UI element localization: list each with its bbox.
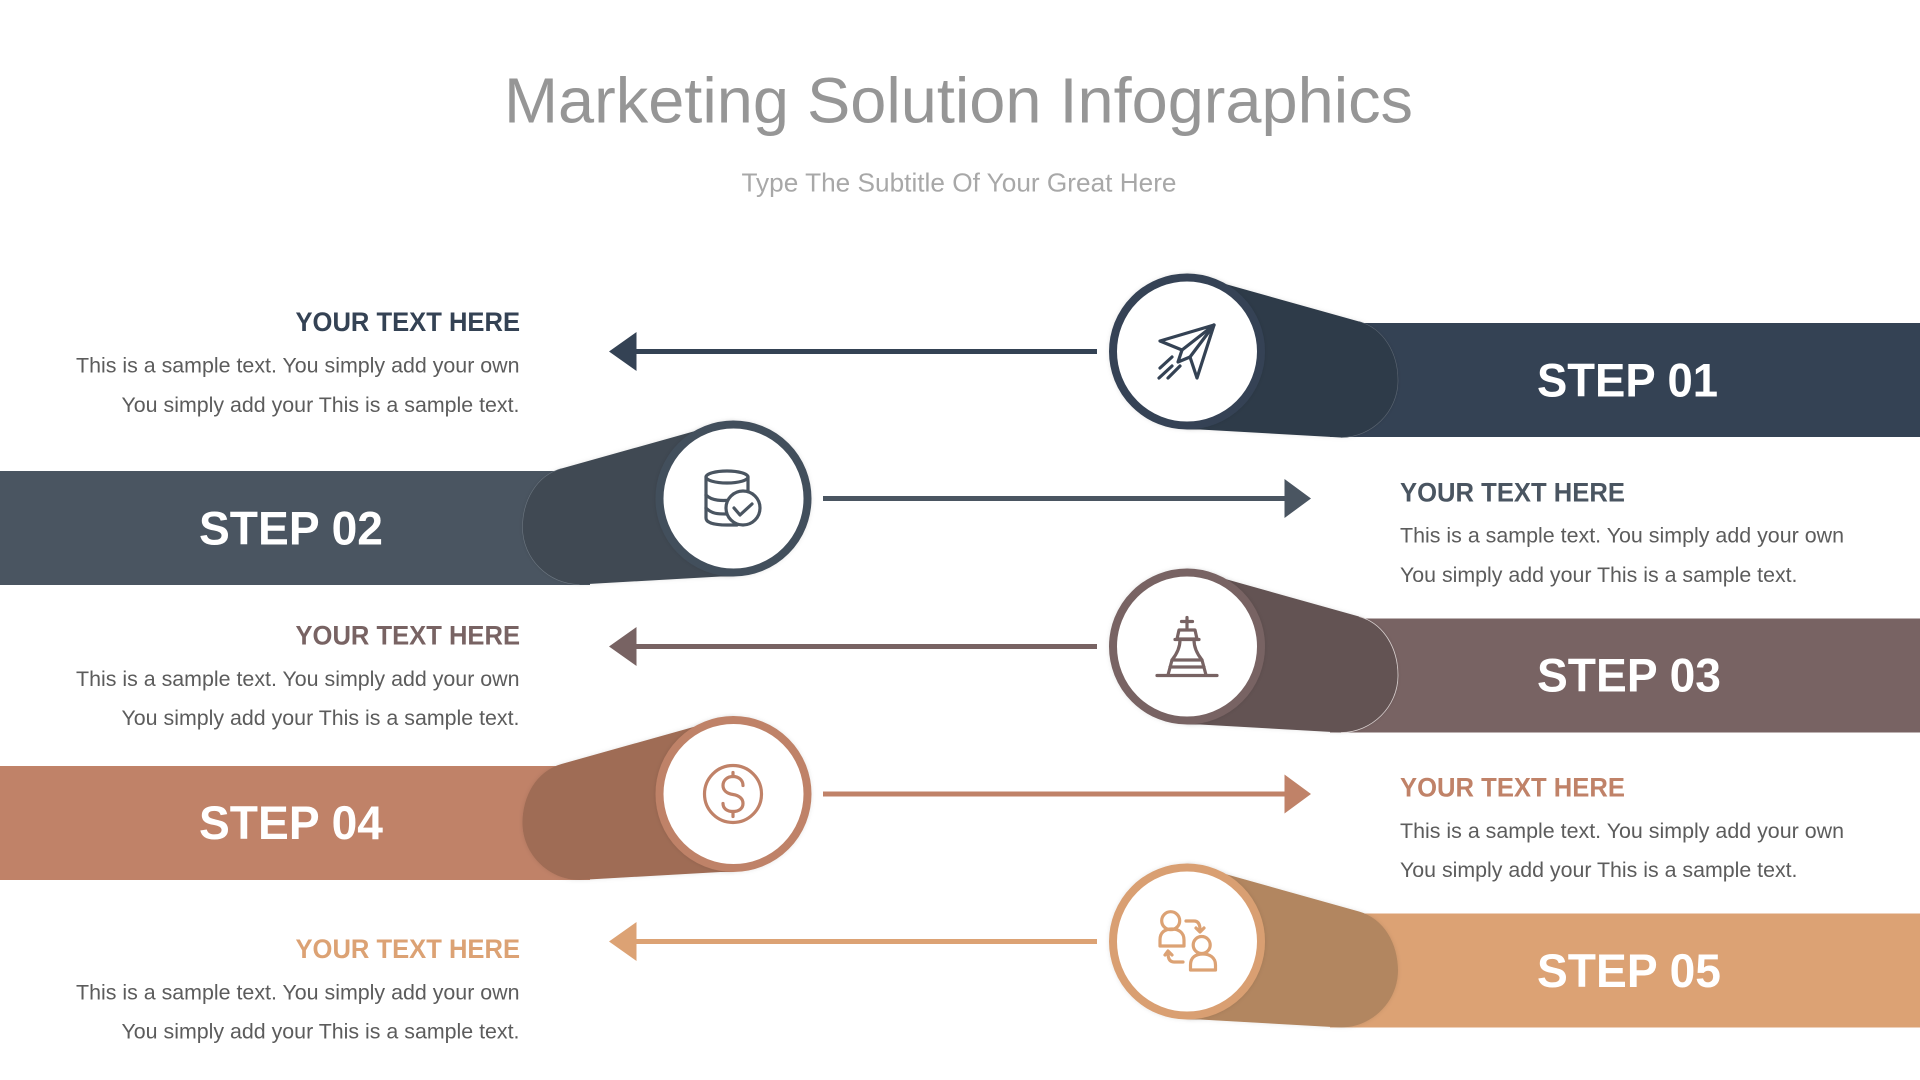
panel: step 04: [0, 716, 1844, 882]
text block: step 04: [1400, 772, 1844, 882]
band: step 01: [1330, 323, 1920, 437]
icon: chess king: [1157, 618, 1217, 676]
icon: people exchange: [1160, 912, 1216, 970]
body line: step 02 second: You simply add your This is a sample text.: [1400, 563, 1798, 587]
icon: database check: [706, 471, 760, 525]
step label: 04: STEP 04: [199, 796, 383, 849]
band: step 03: [1330, 618, 1920, 732]
tube: step 04: [522, 716, 734, 880]
body line: step 03 first: This is a sample text. You simply add your own: [76, 667, 520, 691]
title: Marketing Solution Infographics: [504, 65, 1413, 137]
panel: step 01: [76, 274, 1920, 438]
tube: step 05: [1187, 864, 1398, 1028]
panel: step 05: [76, 864, 1920, 1044]
text block: step 02: [1400, 477, 1844, 587]
body line: step 01 second: You simply add your This is a sample text.: [122, 393, 520, 417]
text block: step 01: [76, 307, 520, 417]
text block: step 05: [76, 934, 520, 1044]
body line: step 04 second: You simply add your This is a sample text.: [1400, 858, 1798, 882]
band: step 02: [0, 471, 590, 585]
arrow: step 05: [609, 922, 1097, 961]
tube: step 03: [1187, 568, 1398, 732]
panel: step 03: [76, 568, 1920, 732]
tube: step 01: [1187, 274, 1398, 438]
heading: step 02: YOUR TEXT HERE: [1400, 477, 1625, 507]
body line: step 01 first: This is a sample text. You simply add your own: [76, 354, 520, 378]
step label: 02: STEP 02: [199, 501, 383, 554]
step label: 01: STEP 01: [1537, 354, 1718, 407]
heading: step 04: YOUR TEXT HERE: [1400, 772, 1625, 802]
icon ring: step 01: [1113, 278, 1261, 426]
arrow: step 03: [609, 627, 1097, 666]
band: step 05: [1330, 914, 1920, 1028]
icon: paper plane: [1159, 325, 1214, 378]
subtitle: Type The Subtitle Of Your Great Here: [742, 168, 1176, 198]
arrow: step 01: [609, 332, 1097, 371]
tube: step 02: [522, 420, 734, 584]
step label: 05: STEP 05: [1537, 944, 1721, 997]
body line: step 05 second: You simply add your This is a sample text.: [122, 1020, 520, 1044]
band: step 04: [0, 766, 590, 880]
icon ring: step 03: [1113, 572, 1261, 720]
step label: 03: STEP 03: [1537, 648, 1721, 702]
icon: dollar coin: [704, 766, 762, 822]
body line: step 03 second: You simply add your This is a sample text.: [122, 706, 520, 730]
body line: step 04 first: This is a sample text. You simply add your own: [1400, 819, 1844, 843]
heading: step 05: YOUR TEXT HERE: [296, 934, 520, 964]
body line: step 05 first: This is a sample text. You simply add your own: [76, 980, 520, 1004]
icon ring: step 05: [1113, 868, 1261, 1016]
heading: step 01: YOUR TEXT HERE: [296, 307, 520, 337]
heading: step 03: YOUR TEXT HERE: [296, 620, 520, 650]
icon ring: step 04: [660, 720, 808, 868]
arrow: step 04: [823, 774, 1311, 814]
body line: step 02 first: This is a sample text. You simply add your own: [1400, 524, 1844, 548]
icon ring: step 02: [660, 424, 808, 572]
arrow: step 02: [823, 479, 1311, 518]
text block: step 03: [76, 620, 520, 730]
panel: step 02: [0, 420, 1844, 587]
